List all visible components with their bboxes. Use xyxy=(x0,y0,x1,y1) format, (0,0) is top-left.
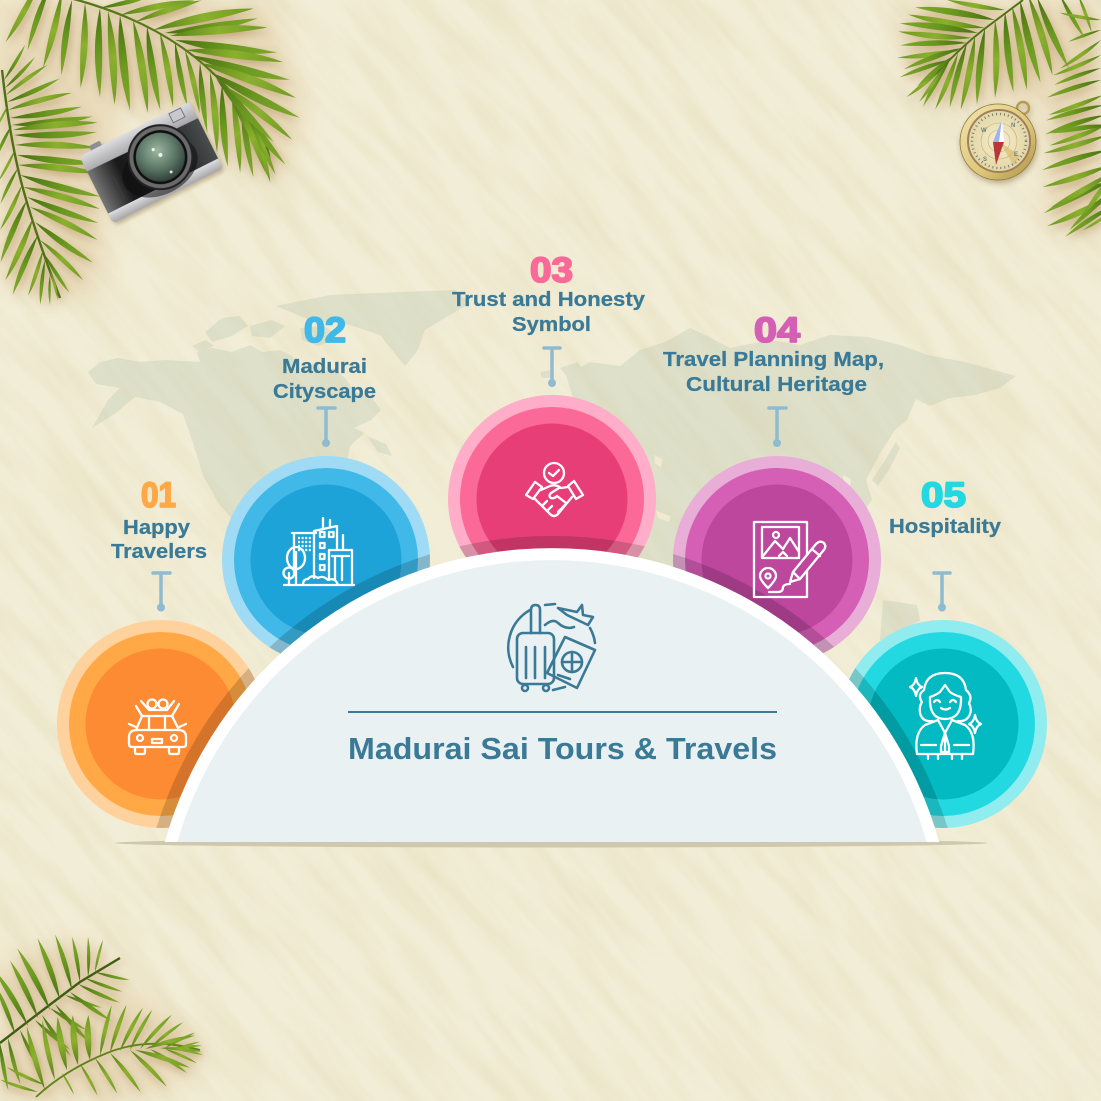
palm frond: left xyxy=(0,44,101,305)
panel: disc 3 Trust and Honesty Symbol xyxy=(448,395,656,558)
label 02: Madurai xyxy=(282,356,367,378)
palm frond: right edge xyxy=(1033,0,1101,238)
label 02: 02 xyxy=(304,311,346,350)
palm frond: top left large xyxy=(4,0,301,183)
world map silhouette xyxy=(88,290,1016,660)
palm frond: bottom left light xyxy=(0,1004,204,1097)
icon: city buildings xyxy=(284,518,354,585)
icon: compass: S xyxy=(983,157,987,163)
label 05: Hospitality xyxy=(889,516,1002,538)
palm frond: bottom left dark xyxy=(0,934,130,1091)
label 04: 04 xyxy=(754,311,801,350)
icon: compass: E xyxy=(1014,152,1018,158)
label 05: 05 xyxy=(921,476,966,515)
icon: luggage, passport and plane xyxy=(508,604,595,691)
panel: disc 1 Happy Travelers xyxy=(57,620,255,828)
icon: compass: N xyxy=(1011,123,1015,129)
label 04: Cultural Heritage xyxy=(686,374,867,396)
panel: central dome xyxy=(165,548,939,842)
title divider xyxy=(348,711,777,713)
icon: compass xyxy=(960,102,1036,180)
panel: disc 4 Travel Planning Map xyxy=(673,456,881,654)
label 04 xyxy=(663,311,884,447)
label 04: Travel Planning Map, xyxy=(663,349,884,371)
icon: map with picture, pin and pencil xyxy=(754,522,825,597)
label 01 xyxy=(111,476,207,612)
label 01: 01 xyxy=(141,476,176,515)
panel: disc 2 Madurai Cityscape xyxy=(222,456,430,654)
label 03: 03 xyxy=(530,251,573,290)
label 03 xyxy=(452,251,646,387)
ground shadow xyxy=(115,838,987,848)
icon: woman greeting xyxy=(910,673,981,759)
title: Madurai Sai Tours & Travels xyxy=(348,731,777,766)
label 02 xyxy=(273,311,376,447)
label 02: Cityscape xyxy=(273,381,376,403)
label 01: Happy xyxy=(123,517,191,539)
icon: car with travelers xyxy=(129,700,186,754)
label 05 xyxy=(889,476,1002,612)
icon: camera xyxy=(77,97,223,223)
panel: disc 5 Hospitality xyxy=(849,620,1047,828)
label 03: Symbol xyxy=(512,314,591,336)
label 01: Travelers xyxy=(111,541,207,563)
palm frond: top right xyxy=(897,0,1057,111)
label 03: Trust and Honesty xyxy=(452,289,646,311)
icon: compass: W xyxy=(981,128,987,134)
icon: handshake with check xyxy=(526,463,583,516)
